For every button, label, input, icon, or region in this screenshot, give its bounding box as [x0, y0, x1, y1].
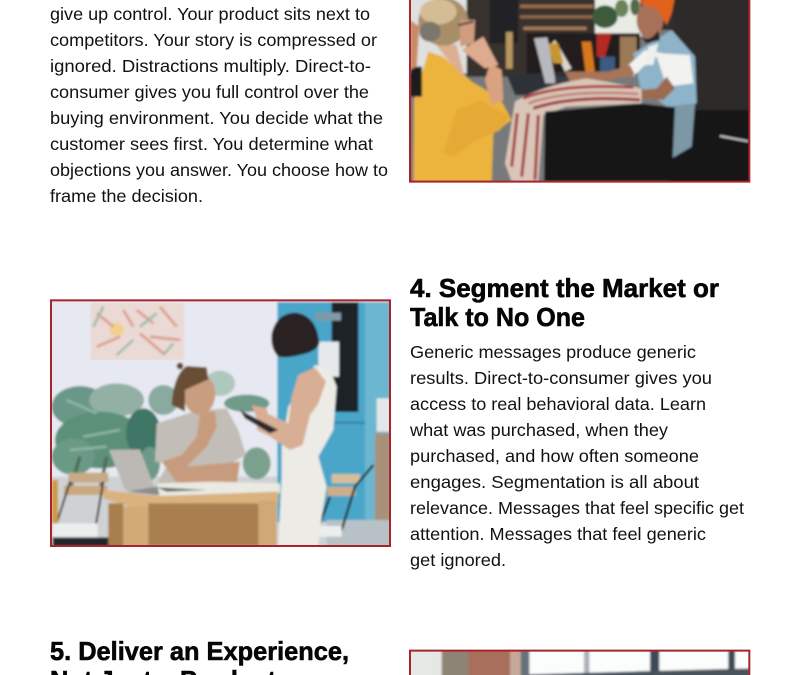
- woman: bob haircut: [271, 313, 319, 357]
- man: t-shirt and arms: [155, 408, 246, 487]
- right cafe chair: [332, 474, 360, 483]
- abstract wall art: [91, 303, 184, 360]
- text block: section 3 body, buying environment: competitors. Your story is compressed or: [50, 30, 377, 50]
- photo: shop owner serving a customer at a clothing store counter: [407, 0, 753, 187]
- photo: woman with a tablet talking to a man at a wooden desk: [47, 297, 393, 550]
- text block: section 3 body, buying environment: objections you answer. You choose how to: [50, 160, 388, 180]
- text block: section 4 body, segmentation: [409, 342, 744, 570]
- left cafe chair: [68, 473, 108, 483]
- woman: white dress: [278, 365, 337, 547]
- man: head, beard and hair: [183, 373, 215, 415]
- text block: section 3 body, buying environment: buying environment. You decide what the: [50, 108, 383, 128]
- woman: arm, hand and neck: [485, 63, 503, 105]
- photo: bright loft with brick wall and large windows, cropped by the page edge: [407, 648, 753, 675]
- folded striped textile: [505, 78, 642, 182]
- wooden desk: [103, 490, 278, 510]
- text block: section 3 body, buying environment: give up control. Your product sits next to: [50, 4, 370, 24]
- black display box: [544, 103, 675, 182]
- text block: section 3 body, buying environment: consumer gives you full control over the: [50, 82, 369, 102]
- text block: section 4 body, segmentation: access to real behavioral data. Learn: [410, 394, 706, 414]
- man: jeans, vest and t-shirt: [667, 100, 695, 158]
- text block: section 4 body, segmentation: engages. Segmentation is all about: [410, 472, 699, 492]
- text block: section 4 body, segmentation: what was purchased, when they: [409, 420, 668, 440]
- text block: section 4 body, segmentation: Generic messages produce generic: [410, 342, 696, 362]
- text block: section 4 body, segmentation: attention. Messages that feel generic: [410, 524, 706, 544]
- heading: section 4: [410, 273, 719, 332]
- text block: section 4 body, segmentation: purchased, and how often someone: [410, 446, 699, 466]
- text block: section 4 body, segmentation: get ignored.: [410, 550, 506, 570]
- woman: blond hair and glasses: [418, 0, 468, 46]
- open book and papers on desk: [157, 482, 280, 497]
- tablet: [240, 410, 278, 433]
- heading: section 5: 5. Deliver an Experience,: [50, 636, 349, 666]
- laptop: [109, 449, 157, 494]
- text block: section 4 body, segmentation: results. Direct-to-consumer gives you: [410, 368, 712, 388]
- blue door: [277, 302, 391, 522]
- text block: section 3 body, buying environment: ignored. Distractions multiply. Direct-to-: [50, 56, 371, 76]
- woman: yellow coat: [413, 52, 512, 182]
- heading: section 4: 4. Segment the Market or: [410, 273, 719, 303]
- text block: section 3 body, buying environment: frame the decision.: [50, 186, 203, 206]
- laptop: [534, 37, 556, 83]
- text block: section 4 body, segmentation: relevance. Messages that feel specific get: [410, 498, 744, 518]
- text block: section 3 body, buying environment: customer sees first. You determine what: [50, 134, 373, 154]
- monstera plants: [52, 384, 98, 425]
- woman: back, arm and shoulders: [257, 367, 326, 450]
- text block: section 3 body, buying environment: [50, 4, 388, 206]
- counter: [507, 72, 567, 97]
- rack of clothes: [527, 33, 640, 75]
- heading: section 4: Talk to No One: [410, 302, 585, 332]
- man: head and beanie: [637, 2, 663, 38]
